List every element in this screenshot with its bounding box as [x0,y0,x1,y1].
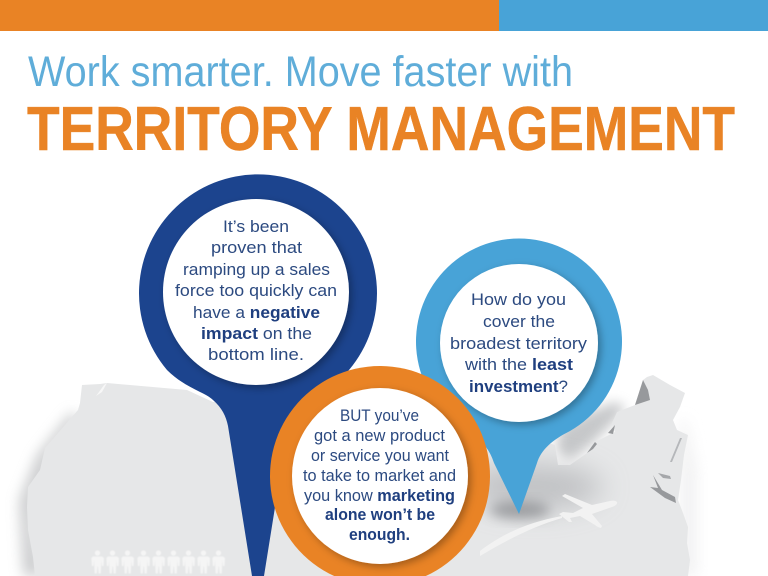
icon: airplane with trail [480,494,617,556]
blue pin text: broadest territory [450,334,588,353]
blue pin inner circle [440,264,598,422]
blue pin text: cover the [483,312,555,331]
orange pin text: BUT you’ve [340,406,419,425]
pin: light blue [416,239,622,514]
navy pin text: impact on the [201,324,312,343]
puget sound inlet [96,383,107,396]
orange pin inner circle [292,388,468,564]
navy pin text: have a negative [193,303,320,322]
pin shadow [467,465,603,509]
pin: orange [270,366,490,576]
icon: row of people [91,550,225,574]
top bar: orange [0,0,499,31]
blue pin text: investment? [469,377,568,396]
heading: subtitle: Work smarter. Move faster with [28,48,573,96]
map of the United States [20,375,697,576]
blue pin text: How do you [471,290,566,309]
pin: navy [139,174,377,576]
navy pin text: force too quickly can [175,281,337,300]
navy pin text: proven that [211,238,302,257]
orange pin text: enough. [349,525,410,544]
orange pin text: you know marketing [304,486,455,505]
blue pin text [450,290,588,396]
orange pin text: or service you want [311,446,449,465]
navy pin text: It’s been [223,217,289,236]
top bar: blue [499,0,768,31]
blue pin text: with the least [464,355,573,374]
coastline details [635,380,650,405]
navy pin inner circle [163,199,349,385]
navy pin text [175,217,337,364]
navy pin text: bottom line. [208,345,304,364]
orange pin text: to take to market and [303,466,456,485]
orange pin text: got a new product [314,426,445,445]
navy pin text: ramping up a sales [183,260,330,279]
orange pin text: alone won’t be [325,505,435,524]
orange pin text [303,406,456,544]
